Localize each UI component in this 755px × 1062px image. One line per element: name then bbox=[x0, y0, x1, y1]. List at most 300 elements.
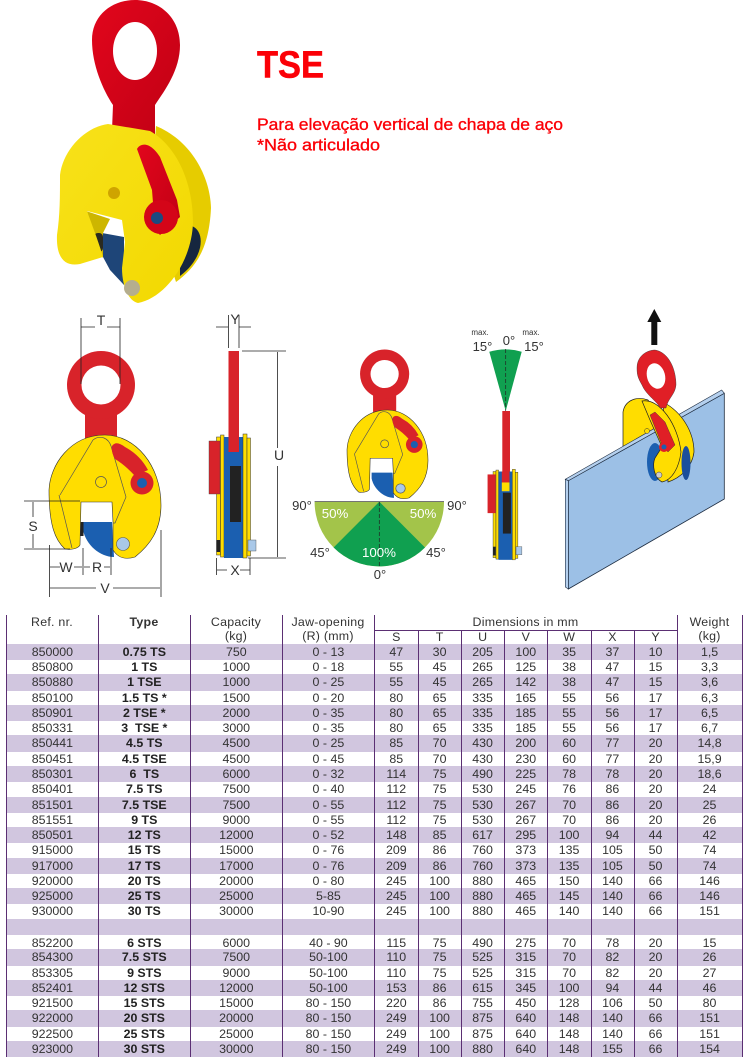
row 850401: 7.5 TS bbox=[126, 782, 163, 796]
row 915000: 50 bbox=[649, 843, 662, 857]
row 850401: 86 bbox=[606, 782, 619, 796]
row 850000: 750 bbox=[226, 645, 247, 659]
row 851551 bbox=[32, 813, 716, 827]
row 850880: 0 - 25 bbox=[313, 675, 344, 689]
row 922000: 151 bbox=[699, 1011, 720, 1025]
dimension labels: Y bbox=[230, 311, 240, 327]
dimension labels: T bbox=[97, 312, 106, 328]
row 850301: 20 bbox=[649, 767, 662, 781]
row 852200: 115 bbox=[386, 936, 406, 950]
table header: dimension letters: W bbox=[563, 630, 575, 644]
row 850800: 47 bbox=[606, 660, 619, 674]
diagram: load chart by angle bbox=[292, 350, 467, 582]
row 850451: 15,9 bbox=[698, 752, 722, 766]
row 850000: 10 bbox=[649, 645, 662, 659]
row 851501 bbox=[6, 797, 742, 813]
clamp front view bbox=[49, 351, 161, 558]
row 851501: 7500 bbox=[222, 798, 250, 812]
row 850331: 185 bbox=[515, 721, 536, 735]
row 851501: 75 bbox=[433, 798, 446, 812]
row 850000: 37 bbox=[606, 645, 619, 659]
row 853305 bbox=[32, 966, 716, 980]
row 922000: 80 - 150 bbox=[306, 1011, 351, 1025]
row 850901: 56 bbox=[606, 706, 619, 720]
row 922000: 249 bbox=[386, 1011, 407, 1025]
row 922500: 140 bbox=[602, 1027, 623, 1041]
row 922500: 151 bbox=[699, 1027, 720, 1041]
percentages: 100% bbox=[362, 545, 396, 560]
row 920000: 66 bbox=[649, 874, 662, 888]
row 851501: 7.5 TSE bbox=[122, 798, 167, 812]
row 850880: 1 TSE bbox=[127, 675, 162, 689]
row 850880: 15 bbox=[649, 675, 662, 689]
row 923000: 80 - 150 bbox=[306, 1042, 351, 1056]
dimension labels: R bbox=[92, 559, 102, 575]
row 854300: 7.5 STS bbox=[122, 950, 167, 964]
row 925000: 140 bbox=[602, 889, 623, 903]
product photo: lifting clamp bbox=[57, 0, 211, 303]
row 854300: 50-100 bbox=[309, 950, 348, 964]
row 851551: 20 bbox=[649, 813, 662, 827]
row 851551: 851551 bbox=[32, 813, 73, 827]
row 852401: 615 bbox=[472, 981, 493, 995]
table header: dimension letters: Y bbox=[651, 630, 660, 644]
row 915000: 105 bbox=[602, 843, 623, 857]
tilt wedge bbox=[489, 349, 522, 411]
subtitle: Para elevação vertical de chapa de aço bbox=[257, 115, 563, 134]
row 850880: 142 bbox=[515, 675, 536, 689]
angle fan bbox=[315, 502, 444, 566]
row 850401: 7500 bbox=[222, 782, 250, 796]
row 850451 bbox=[32, 752, 722, 766]
row 850100: 335 bbox=[472, 691, 493, 705]
angle labels: 45° bbox=[310, 545, 330, 560]
percentages: 50% bbox=[322, 506, 348, 521]
row 852200: 70 bbox=[562, 936, 576, 950]
row 922000: 140 bbox=[602, 1011, 623, 1025]
diagram: lateral tilt limit bbox=[471, 328, 544, 560]
row 850451: 230 bbox=[515, 752, 536, 766]
dimension lines bbox=[24, 318, 161, 597]
row 915000: 915000 bbox=[32, 843, 73, 857]
row 923000: 640 bbox=[515, 1042, 536, 1056]
row 917000: 105 bbox=[602, 859, 623, 873]
row 921500 bbox=[32, 996, 716, 1010]
row 850301: 78 bbox=[606, 767, 619, 781]
row 850301: 78 bbox=[562, 767, 576, 781]
row 925000: 146 bbox=[699, 889, 720, 903]
row 850100: 850100 bbox=[32, 691, 73, 705]
row 850501: 617 bbox=[472, 828, 493, 842]
row 850451: 4500 bbox=[222, 752, 250, 766]
row 850501: 0 - 52 bbox=[313, 828, 344, 842]
row 930000: 100 bbox=[429, 904, 450, 918]
row 850901: 2 TSE * bbox=[123, 706, 166, 720]
row 850401: 76 bbox=[562, 782, 576, 796]
row 850401: 20 bbox=[649, 782, 662, 796]
row 850000: 205 bbox=[472, 645, 493, 659]
clamp side view bbox=[209, 351, 256, 558]
row 851551: 86 bbox=[606, 813, 619, 827]
table header: dimension letters bbox=[392, 630, 660, 644]
row 850800: 1 TS bbox=[131, 660, 157, 674]
row 850901: 0 - 35 bbox=[313, 706, 344, 720]
row 925000: 25 TS bbox=[128, 889, 161, 903]
row 850301: 18,6 bbox=[698, 767, 722, 781]
row 850800: 1000 bbox=[222, 660, 250, 674]
row 930000: 880 bbox=[472, 904, 493, 918]
row 917000: 86 bbox=[433, 859, 446, 873]
row 925000: 5-85 bbox=[316, 889, 341, 903]
row 850800: 3,3 bbox=[701, 660, 718, 674]
row 850331 bbox=[32, 721, 718, 735]
row 850331: 6,7 bbox=[701, 721, 718, 735]
row 854300: 20 bbox=[649, 950, 662, 964]
row 854300: 525 bbox=[472, 950, 493, 964]
diagram: clamp lifting plate bbox=[565, 309, 724, 589]
blank separator row bbox=[6, 919, 742, 935]
row 850901: 185 bbox=[515, 706, 536, 720]
row 851551: 267 bbox=[515, 813, 536, 827]
table header: dimension letters: U bbox=[478, 630, 487, 644]
row 850000: 1,5 bbox=[701, 645, 718, 659]
row 930000 bbox=[32, 904, 720, 918]
row 850000: 100 bbox=[515, 645, 536, 659]
row 850100: 80 bbox=[389, 691, 403, 705]
row 850000: 0 - 13 bbox=[313, 645, 344, 659]
dimension labels: U bbox=[274, 447, 284, 463]
row 922000: 20 STS bbox=[124, 1011, 165, 1025]
row 915000: 74 bbox=[703, 843, 716, 857]
row 850501: 42 bbox=[703, 828, 716, 842]
row 850441: 70 bbox=[433, 736, 446, 750]
row 850100: 165 bbox=[515, 691, 536, 705]
arrow: lifting direction bbox=[647, 309, 661, 345]
row 930000: 140 bbox=[559, 904, 579, 918]
row 922500: 100 bbox=[429, 1027, 450, 1041]
row 850301: 0 - 32 bbox=[313, 767, 344, 781]
table header: dimension letters: X bbox=[608, 630, 617, 644]
row 850301: 6000 bbox=[222, 767, 250, 781]
row 850441: 77 bbox=[606, 736, 619, 750]
row 850100: 65 bbox=[433, 691, 446, 705]
row 850331: 56 bbox=[606, 721, 619, 735]
row 922500: 66 bbox=[649, 1027, 662, 1041]
row 852401: 86 bbox=[433, 981, 446, 995]
row 915000: 15000 bbox=[219, 843, 254, 857]
row 850451: 430 bbox=[472, 752, 493, 766]
row 925000: 66 bbox=[649, 889, 662, 903]
row 930000: 30 TS bbox=[128, 904, 161, 918]
row 850800: 45 bbox=[433, 660, 446, 674]
row 923000: 100 bbox=[429, 1042, 450, 1056]
row 853305: 27 bbox=[703, 966, 716, 980]
table header: Jaw-opening: (R) (mm) bbox=[302, 629, 354, 643]
row 850501: 148 bbox=[386, 828, 407, 842]
row 850901: 2000 bbox=[222, 706, 250, 720]
row 854300: 315 bbox=[515, 950, 536, 964]
table header: Capacity: Capacity bbox=[211, 614, 261, 628]
subtitle bbox=[257, 115, 563, 154]
row 917000: 74 bbox=[703, 859, 716, 873]
row 921500: 86 bbox=[433, 996, 446, 1010]
row 854300: 110 bbox=[386, 950, 406, 964]
row 917000: 0 - 76 bbox=[313, 859, 344, 873]
row 852401: 46 bbox=[703, 981, 716, 995]
row 853305: 110 bbox=[386, 966, 406, 980]
dimension labels bbox=[28, 312, 110, 596]
row 853305: 9000 bbox=[222, 966, 250, 980]
tilt labels: 0° bbox=[503, 333, 515, 348]
row 850880: 1000 bbox=[222, 675, 250, 689]
row 917000: 917000 bbox=[32, 859, 73, 873]
row 922000: 148 bbox=[559, 1011, 579, 1025]
steel plate bbox=[565, 390, 724, 589]
row 850800: 15 bbox=[649, 660, 662, 674]
row 920000: 146 bbox=[699, 874, 720, 888]
row 850880: 47 bbox=[606, 675, 619, 689]
row 922000: 640 bbox=[515, 1011, 536, 1025]
row 850501: 100 bbox=[559, 828, 579, 842]
row 851501: 112 bbox=[386, 798, 406, 812]
row 920000: 150 bbox=[559, 874, 579, 888]
row 923000 bbox=[6, 1041, 742, 1057]
row 852200: 6000 bbox=[222, 936, 250, 950]
row 915000: 0 - 76 bbox=[313, 843, 344, 857]
row 922000 bbox=[6, 1010, 742, 1027]
row 923000: 148 bbox=[559, 1042, 579, 1056]
row 921500: 220 bbox=[386, 996, 407, 1010]
row 850441: 85 bbox=[389, 736, 403, 750]
percentages: 50% bbox=[410, 506, 436, 521]
row 850401 bbox=[32, 782, 716, 796]
row 850401: 245 bbox=[515, 782, 536, 796]
row 850880: 850880 bbox=[32, 675, 73, 689]
row 852200: 490 bbox=[472, 936, 493, 950]
row 852200: 275 bbox=[515, 936, 536, 950]
row 850501: 94 bbox=[606, 828, 619, 842]
row 853305: 525 bbox=[472, 966, 493, 980]
row 853305: 50-100 bbox=[309, 966, 348, 980]
row 851501: 267 bbox=[515, 798, 536, 812]
row 923000: 880 bbox=[472, 1042, 493, 1056]
row 850441: 60 bbox=[562, 736, 576, 750]
row 850000: 47 bbox=[389, 645, 403, 659]
row 850501: 850501 bbox=[32, 828, 73, 842]
row 921500: 15 STS bbox=[124, 996, 165, 1010]
row 921500: 106 bbox=[602, 996, 623, 1010]
row 850501: 85 bbox=[433, 828, 446, 842]
table header: Ref. nr.: Ref. nr. bbox=[31, 614, 73, 628]
row 850901: 80 bbox=[389, 706, 403, 720]
row 921500: 128 bbox=[559, 996, 579, 1010]
tilt labels: max. bbox=[522, 328, 540, 337]
table header: Weight bbox=[690, 614, 730, 643]
dimension labels: S bbox=[28, 518, 38, 534]
row 930000: 151 bbox=[699, 904, 720, 918]
table header: Jaw-opening: Jaw-opening bbox=[291, 614, 364, 628]
dimension lines bbox=[216, 315, 286, 575]
clamp on plate bbox=[637, 350, 694, 482]
row 850901: 17 bbox=[649, 706, 662, 720]
row 850301: 6 TS bbox=[129, 767, 159, 781]
row 920000: 920000 bbox=[32, 874, 73, 888]
row 850441: 4.5 TS bbox=[126, 736, 163, 750]
row 850331: 65 bbox=[433, 721, 446, 735]
row 915000: 760 bbox=[472, 843, 493, 857]
row 850451: 20 bbox=[649, 752, 662, 766]
row 850880: 55 bbox=[389, 675, 403, 689]
row 922000: 20000 bbox=[219, 1011, 254, 1025]
row 921500: 921500 bbox=[32, 996, 73, 1010]
row 917000: 17000 bbox=[219, 859, 254, 873]
dimension labels: W bbox=[59, 559, 73, 575]
row 850451: 4.5 TSE bbox=[122, 752, 167, 766]
row 851551: 530 bbox=[472, 813, 493, 827]
row 850451: 70 bbox=[433, 752, 446, 766]
row 915000: 86 bbox=[433, 843, 446, 857]
row 850501 bbox=[6, 827, 742, 843]
row 850451: 0 - 45 bbox=[313, 752, 344, 766]
row 915000: 209 bbox=[386, 843, 407, 857]
row 922500: 80 - 150 bbox=[306, 1027, 351, 1041]
row 917000: 17 TS bbox=[128, 859, 161, 873]
row 921500: 755 bbox=[472, 996, 493, 1010]
row 850100 bbox=[32, 691, 718, 705]
row 852200: 15 bbox=[703, 936, 716, 950]
row 850451: 60 bbox=[562, 752, 576, 766]
side view clamp bbox=[488, 411, 522, 560]
row 850331: 80 bbox=[389, 721, 403, 735]
row 850000 bbox=[6, 644, 742, 660]
row 850441: 4500 bbox=[222, 736, 250, 750]
table header: Dimensions: Dimensions in mm bbox=[473, 614, 578, 628]
row 917000 bbox=[6, 858, 742, 874]
row 922500: 640 bbox=[515, 1027, 536, 1041]
title: TSE bbox=[257, 44, 324, 86]
row 853305: 853305 bbox=[32, 966, 73, 980]
row 850501: 12 TS bbox=[128, 828, 161, 842]
subtitle: *Não articulado bbox=[257, 136, 380, 154]
row 851551: 75 bbox=[433, 813, 446, 827]
row 922500: 875 bbox=[472, 1027, 493, 1041]
row 850800 bbox=[32, 660, 718, 674]
row 850501: 12000 bbox=[219, 828, 254, 842]
row 851551: 70 bbox=[562, 813, 576, 827]
row 850501: 44 bbox=[649, 828, 662, 842]
row 915000: 135 bbox=[559, 843, 579, 857]
row 854300: 854300 bbox=[32, 950, 73, 964]
row 921500: 15000 bbox=[219, 996, 254, 1010]
row 852401: 153 bbox=[386, 981, 407, 995]
row 852200 bbox=[32, 936, 716, 950]
row 850401: 530 bbox=[472, 782, 493, 796]
row 923000: 66 bbox=[649, 1042, 662, 1056]
row 850401: 850401 bbox=[32, 782, 73, 796]
row 850000: 35 bbox=[562, 645, 576, 659]
row 853305: 75 bbox=[433, 966, 446, 980]
table header: Jaw-opening bbox=[291, 614, 364, 643]
row 850800: 265 bbox=[472, 660, 493, 674]
row 850100: 0 - 20 bbox=[313, 691, 344, 705]
tilt labels: max. bbox=[471, 328, 489, 337]
row 925000: 145 bbox=[559, 889, 579, 903]
row 925000: 245 bbox=[386, 889, 407, 903]
table header: Capacity: (kg) bbox=[225, 629, 247, 643]
row 925000: 925000 bbox=[32, 889, 73, 903]
row 853305: 315 bbox=[515, 966, 536, 980]
table header: Type: Type bbox=[130, 614, 158, 628]
row 920000: 245 bbox=[386, 874, 407, 888]
row 850880: 45 bbox=[433, 675, 446, 689]
row 850800: 38 bbox=[562, 660, 576, 674]
angle labels: 90° bbox=[292, 498, 312, 513]
row 920000: 20 TS bbox=[128, 874, 161, 888]
row 854300: 7500 bbox=[222, 950, 250, 964]
row 854300: 82 bbox=[606, 950, 619, 964]
row 852401: 852401 bbox=[32, 981, 73, 995]
row 850441: 14,8 bbox=[698, 736, 722, 750]
row 854300: 26 bbox=[703, 950, 716, 964]
row 852200: 20 bbox=[649, 936, 662, 950]
row 925000: 880 bbox=[472, 889, 493, 903]
row 930000: 10-90 bbox=[313, 904, 344, 918]
row 850331: 3 TSE * bbox=[121, 721, 167, 735]
row 852401: 12000 bbox=[219, 981, 254, 995]
row 917000: 373 bbox=[515, 859, 536, 873]
row 922000: 922000 bbox=[32, 1011, 73, 1025]
row 850331: 55 bbox=[562, 721, 576, 735]
row 920000: 880 bbox=[472, 874, 493, 888]
table header: Weight: (kg) bbox=[698, 629, 721, 643]
row 853305: 82 bbox=[606, 966, 619, 980]
row 851551: 112 bbox=[386, 813, 406, 827]
tilt labels: 15° bbox=[524, 339, 544, 354]
row 852401: 50-100 bbox=[309, 981, 348, 995]
row 922500: 249 bbox=[386, 1027, 407, 1041]
row 923000: 923000 bbox=[32, 1042, 73, 1056]
percentages bbox=[322, 506, 436, 560]
row 930000: 30000 bbox=[219, 904, 254, 918]
row 850880: 38 bbox=[562, 675, 576, 689]
row 850441: 0 - 25 bbox=[313, 736, 344, 750]
row 850401: 24 bbox=[703, 782, 716, 796]
row 930000: 66 bbox=[649, 904, 662, 918]
row 850800: 0 - 18 bbox=[313, 660, 344, 674]
row 851501: 70 bbox=[562, 798, 576, 812]
row 850401: 75 bbox=[433, 782, 446, 796]
row 854300 bbox=[6, 949, 742, 966]
row 920000 bbox=[32, 874, 720, 888]
row 921500: 80 - 150 bbox=[306, 996, 351, 1010]
table header: Weight: Weight bbox=[690, 614, 729, 628]
row 920000: 0 - 80 bbox=[313, 874, 344, 888]
row 922500 bbox=[32, 1027, 720, 1041]
row 850401: 0 - 40 bbox=[313, 782, 344, 796]
illustrations bbox=[24, 0, 725, 597]
row 853305: 20 bbox=[649, 966, 662, 980]
angle labels: 90° bbox=[447, 498, 467, 513]
row 850451: 77 bbox=[606, 752, 619, 766]
row 850501: 295 bbox=[515, 828, 536, 842]
row 930000: 930000 bbox=[32, 904, 73, 918]
row 850331: 3000 bbox=[222, 721, 250, 735]
row 850100: 17 bbox=[649, 691, 662, 705]
dimension labels: V bbox=[100, 580, 110, 596]
diagram: side view with dimensions bbox=[209, 311, 286, 578]
row 925000: 25000 bbox=[219, 889, 254, 903]
row 922500: 25 STS bbox=[124, 1027, 165, 1041]
